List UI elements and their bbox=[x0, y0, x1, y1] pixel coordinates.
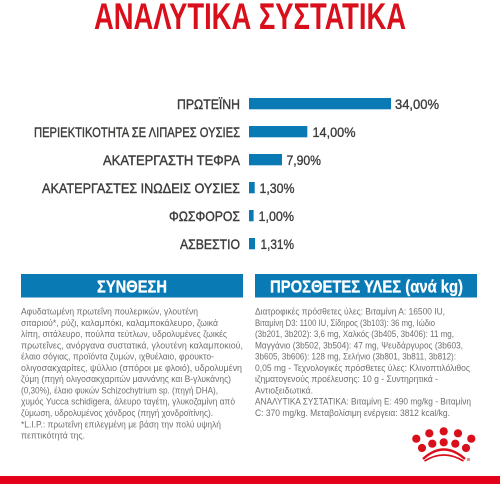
text block: additives list: C: 370 mg/kg. Μεταβολίσιμη ενέργεια: 3812 kcal/kg. bbox=[255, 408, 450, 419]
row: calcium: ΑΣΒΕΣΤΙΟ bbox=[180, 236, 240, 252]
text block: additives list: Μαγγάνιο (3b502, 3b504): 47 mg, Ψευδάργυρος (3b603, bbox=[255, 340, 463, 351]
text block: composition ingredients: πρωτεΐνες, ανόργανα συστατικά, γλουτένη καλαμποκιού, bbox=[21, 340, 243, 351]
row: protein bbox=[177, 96, 439, 112]
row: fat content: 14,00% bbox=[312, 124, 356, 140]
text block: additives list: ΑΝΑΛΥΤΙΚΑ ΣΥΣΤΑΤΙΚΑ: Βιταμίνη Ε: 490 mg/kg - Βιταμίνη bbox=[255, 397, 471, 408]
footer bar bbox=[0, 476, 500, 484]
text block: additives list: 3b605, 3b606): 128 mg, Σελήνιο (3b801, 3b811, 3b812): bbox=[255, 352, 456, 363]
text block: composition ingredients: ζύμωση, υδρολυμένος χόνδρος (πηγή χονδροϊτίνης). bbox=[21, 408, 213, 419]
text block: composition ingredients: πεπτικότητά της. bbox=[21, 431, 85, 442]
row: crude ash: ΑΚΑΤΕΡΓΑΣΤΗ ΤΕΦΡΑ bbox=[103, 152, 241, 168]
text block: composition ingredients: λίπη, σιτάλευρο, πούλπα τεύτλων, υδρολυμένες ζωικές bbox=[21, 329, 227, 340]
heading: additives per kg: ΠΡΟΣΘΕΤΕΣ ΥΛΕΣ (ανά kg) bbox=[270, 277, 463, 297]
text block: composition ingredients bbox=[21, 306, 243, 442]
text block: composition ingredients: ολιγοσακχαρίτες, ψύλλιο (σπόροι με φλοιό), υδρολυμένη bbox=[21, 363, 242, 374]
panel: additives bbox=[255, 274, 477, 419]
panel: composition bbox=[21, 274, 243, 442]
text block: additives list: Αντιοξειδωτικά. bbox=[255, 386, 313, 396]
text block: additives list: 0,05 mg - Τεχνολογικές πρόσθετες ύλες: Κλινοπτιλόλιθος bbox=[255, 363, 470, 374]
bar chart: analytical constituents bbox=[34, 96, 439, 252]
text block: additives list: (3b201, 3b202): 3,6 mg, Χαλκός (3b405, 3b406): 11 mg, bbox=[255, 329, 454, 340]
heading: composition bbox=[21, 274, 243, 298]
row: crude fibre: ΑΚΑΤΕΡΓΑΣΤΕΣ ΙΝΩΔΕΙΣ ΟΥΣΙΕΣ bbox=[42, 180, 240, 196]
row: protein: ΠΡΩΤΕΪΝΗ bbox=[177, 96, 240, 112]
row: protein: 34,00% bbox=[395, 96, 439, 112]
row: crude fibre: 1,30% bbox=[260, 180, 294, 196]
row: fat content: ΠΕΡΙΕΚΤΙΚΟΤΗΤΑ ΣΕ ΛΙΠΑΡΕΣ ΟΥΣΙΕΣ bbox=[34, 124, 240, 140]
text block: composition ingredients: ζύμη (πηγή ολιγοσακχαριτών μαννάνης και Β-γλυκάνης) bbox=[21, 374, 231, 385]
text block: composition ingredients: (0,30%), έλαιο φυκών Schizochytrium sp. (πηγή DHA), bbox=[21, 386, 218, 396]
text block: additives list: Βιταμίνη D3: 1100 IU, Σίδηρος (3b103): 36 mg, Ιώδιο bbox=[255, 318, 435, 329]
row: calcium bbox=[180, 236, 294, 252]
heading: composition: ΣΥΝΘΕΣΗ bbox=[97, 277, 167, 297]
text block: additives list: ιζηματογενούς προέλευσης: 10 g - Συντηρητικά - bbox=[255, 374, 438, 385]
row: crude ash: 7,90% bbox=[286, 152, 321, 168]
text block: composition ingredients: Αφυδατωμένη πρωτεΐνη πουλερικών, γλουτένη bbox=[21, 306, 198, 318]
text block: additives list: Διατροφικές πρόσθετες ύλες: Βιταμίνη Α: 16500 IU, bbox=[255, 306, 445, 318]
row: calcium: 1,31% bbox=[260, 236, 294, 252]
row: phosphorus: 1,00% bbox=[258, 208, 294, 224]
row: phosphorus bbox=[169, 208, 294, 224]
row: phosphorus: ΦΩΣΦΟΡΟΣ bbox=[169, 208, 240, 224]
icon: royal crown logo bbox=[412, 427, 475, 461]
row: crude ash bbox=[103, 152, 321, 168]
text block: composition ingredients: σιταριού*, ρύζι, καλαμπόκι, καλαμποκάλευρο, ζωικά bbox=[21, 318, 218, 329]
text block: composition ingredients: χυμός Yucca schidigera, άλευρο ταγέτη, γλυκοζαμίνη από bbox=[21, 397, 235, 408]
text block: additives list bbox=[255, 306, 471, 419]
text block: composition ingredients: έλαιο σόγιας, προϊόντα ζυμών, ιχθυέλαιο, φρουκτο- bbox=[21, 352, 214, 363]
text block: composition ingredients: *L.I.P.: πρωτεΐνη επιλεγμένη με βάση την πολύ υψηλή bbox=[21, 419, 221, 430]
